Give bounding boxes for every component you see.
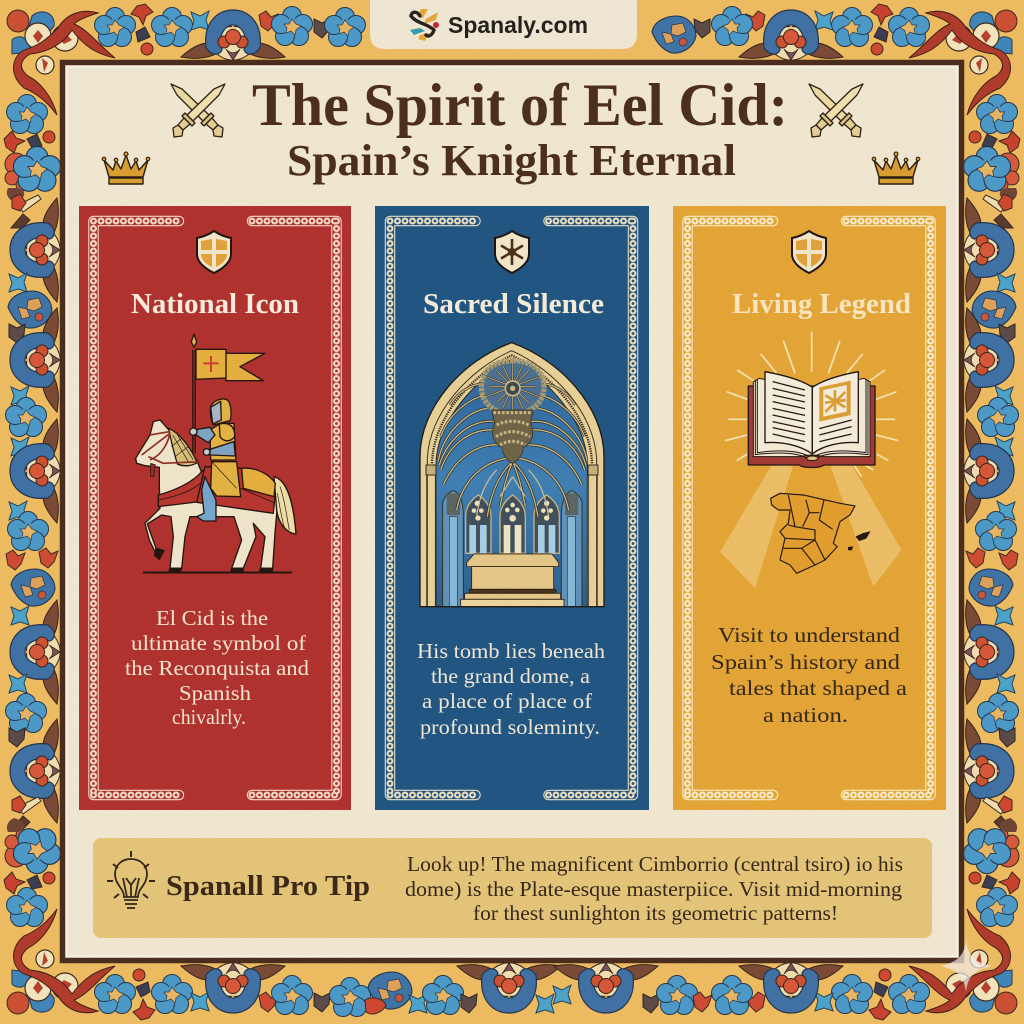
icon: Spanaly logo xyxy=(410,9,439,41)
panel: sacred silence xyxy=(375,206,649,810)
map of Spain xyxy=(771,493,855,573)
tip body text: for thest sunlighton its geometric patterns! xyxy=(473,901,838,925)
central lancet windows xyxy=(466,495,559,553)
panel body text: a place of place of xyxy=(422,689,592,713)
icon: crossed swords right xyxy=(809,84,863,137)
page stack xyxy=(753,378,870,457)
left page lines xyxy=(773,382,805,442)
right column of florals xyxy=(963,94,1020,926)
panel body text xyxy=(417,639,606,739)
left page xyxy=(765,372,812,454)
panel body text xyxy=(125,606,310,729)
pilasters xyxy=(426,465,598,475)
extra flower beside logo tab xyxy=(324,8,366,46)
banner pole xyxy=(188,350,199,453)
icon: shield xyxy=(197,231,231,273)
left column of florals xyxy=(4,94,61,926)
bottom row, right xyxy=(712,909,1017,1020)
watermark sparkle xyxy=(940,940,992,992)
icon: crossed swords left xyxy=(171,84,225,137)
icon: shield with snowflake xyxy=(495,231,529,273)
illustration: knight on horseback xyxy=(136,334,296,573)
horse xyxy=(136,420,277,568)
subtitle: Spain’s Knight Eternal xyxy=(287,136,736,185)
panel body text: tales that shaped a xyxy=(729,676,908,700)
panel body text: His tomb lies beneah xyxy=(417,639,606,663)
mane xyxy=(169,428,197,466)
right page lines xyxy=(819,420,852,442)
hooves xyxy=(155,548,273,573)
banner xyxy=(196,349,265,381)
arm xyxy=(196,427,215,443)
tomb xyxy=(461,554,564,607)
tail xyxy=(274,477,296,534)
logo wordmark: Spanaly.com xyxy=(448,12,588,38)
panel body text: Visit to understand xyxy=(718,623,900,647)
icon: crown left xyxy=(102,152,150,184)
tip heading: Spanall Pro Tip xyxy=(166,870,370,902)
panel frame ornament xyxy=(94,221,336,795)
top row of florals, left xyxy=(7,4,330,115)
tabard xyxy=(211,462,241,497)
bottom row, left xyxy=(7,909,312,1020)
panel heading: Sacred Silence xyxy=(423,289,604,320)
top row of florals, right xyxy=(694,4,1017,115)
light rays xyxy=(725,332,898,477)
book cover xyxy=(748,386,875,467)
panel body text xyxy=(711,623,908,727)
panel body text: Spanish xyxy=(179,681,252,705)
vault interior xyxy=(436,359,587,607)
islands xyxy=(848,532,870,550)
tip body text: Look up! The magnificent Cimborrio (central tsiro) io his xyxy=(407,852,903,876)
panel frame ornament xyxy=(688,221,930,795)
ground line xyxy=(143,572,292,574)
helmet xyxy=(210,399,231,425)
panel body text: ultimate symbol of xyxy=(131,631,306,655)
panel body text: a nation. xyxy=(763,703,848,727)
icon: crown right xyxy=(872,152,920,184)
bridle xyxy=(142,432,200,463)
illustration: cathedral dome and tomb xyxy=(420,343,604,607)
pro tip panel xyxy=(93,838,932,938)
chest cloth xyxy=(158,467,212,507)
torso xyxy=(210,423,236,460)
illustration: open book and map of Spain xyxy=(720,332,902,588)
panel body text: profound soleminty. xyxy=(420,715,600,739)
panel body text: Spain’s history and xyxy=(711,650,900,674)
panel heading: Living Legend xyxy=(732,289,911,320)
panel body text: the Reconquista and xyxy=(125,656,310,680)
pendant boss xyxy=(492,410,533,464)
panel body text: chivalrly. xyxy=(172,705,246,729)
cimborrio rose xyxy=(481,361,544,414)
side window columns xyxy=(443,491,463,607)
title: The Spirit of Eel Cid: xyxy=(252,72,788,138)
panel body text: the grand dome, a xyxy=(431,664,591,688)
tip body text: dome) is the Plate-esque masterpiice. Visit mid-morning xyxy=(405,877,903,901)
knight leg xyxy=(197,477,216,521)
tip body text xyxy=(405,852,903,925)
icon: shield xyxy=(792,231,826,273)
panel frame ornament xyxy=(390,221,633,795)
panel heading: National Icon xyxy=(131,289,299,320)
right page xyxy=(812,372,858,454)
saddle cloth xyxy=(197,467,275,513)
extra flower beside logo tab xyxy=(652,16,696,53)
vault ribs xyxy=(438,383,587,517)
icon: lightbulb xyxy=(107,851,155,908)
bottom row, centre xyxy=(314,963,712,1016)
light beams xyxy=(720,465,902,588)
right page illustration xyxy=(819,381,851,422)
outer arch xyxy=(420,343,604,607)
logo tab xyxy=(370,0,637,49)
panel body text: El Cid is the xyxy=(156,606,268,630)
panel: living legend xyxy=(673,206,946,810)
main parchment frame xyxy=(62,62,962,960)
spine clasp xyxy=(807,456,818,461)
panel: national icon xyxy=(79,206,351,810)
